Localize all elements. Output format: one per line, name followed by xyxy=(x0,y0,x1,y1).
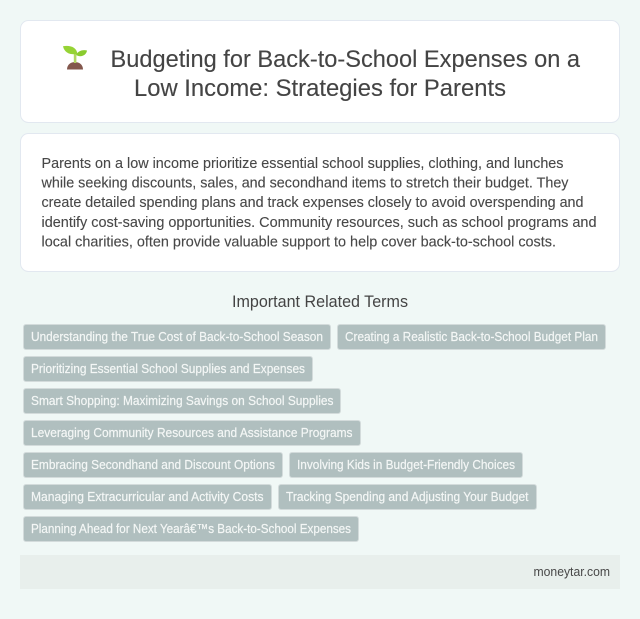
tag xyxy=(278,484,536,510)
tag: Creating a Realistic Back-to-School Budget Plan xyxy=(345,329,598,344)
panel: title card xyxy=(20,20,620,122)
icon: seedling xyxy=(63,46,87,70)
summary paragraph: create detailed spending plans and track expenses closely to avoid overspending and xyxy=(42,194,584,211)
tag xyxy=(290,452,522,478)
summary paragraph: Parents on a low income prioritize essential school supplies, clothing, and lunches xyxy=(42,155,564,172)
title: Low Income: Strategies for Parents xyxy=(134,75,506,102)
tag xyxy=(338,324,606,350)
summary paragraph: local charities, often provide valuable support to help cover back-to-school costs. xyxy=(42,233,556,250)
tag xyxy=(24,388,340,414)
panel: summary card xyxy=(20,134,620,272)
tag: Smart Shopping: Maximizing Savings on School Supplies xyxy=(31,393,334,408)
tag: Prioritizing Essential School Supplies and Expenses xyxy=(31,361,305,376)
footer source text: moneytar.com xyxy=(534,564,610,579)
tag: Understanding the True Cost of Back-to-School Season xyxy=(31,329,323,344)
tag xyxy=(24,324,330,350)
tag xyxy=(24,484,272,510)
tag group: related terms xyxy=(24,324,606,542)
footer bar xyxy=(20,555,620,589)
tag xyxy=(24,516,358,542)
tag: Managing Extracurricular and Activity Costs xyxy=(31,489,264,504)
summary paragraph: while seeking discounts, sales, and secondhand items to stretch their budget. They xyxy=(41,175,569,192)
summary paragraph xyxy=(41,155,597,250)
tag xyxy=(24,356,312,382)
tag xyxy=(24,452,282,478)
heading: related terms: Important Related Terms xyxy=(232,293,408,311)
tag xyxy=(24,420,360,446)
tag: Involving Kids in Budget-Friendly Choices xyxy=(297,457,515,472)
title xyxy=(110,46,580,102)
tag: Embracing Secondhand and Discount Options xyxy=(31,457,275,472)
tag: Tracking Spending and Adjusting Your Budget xyxy=(286,489,529,504)
summary paragraph: identify cost-saving opportunities. Community resources, such as school programs and xyxy=(42,214,596,231)
title: Budgeting for Back-to-School Expenses on a xyxy=(110,46,580,73)
tag: Leveraging Community Resources and Assistance Programs xyxy=(31,425,353,440)
tag: Planning Ahead for Next Yearâ€™s Back-to-School Expenses xyxy=(31,521,351,536)
